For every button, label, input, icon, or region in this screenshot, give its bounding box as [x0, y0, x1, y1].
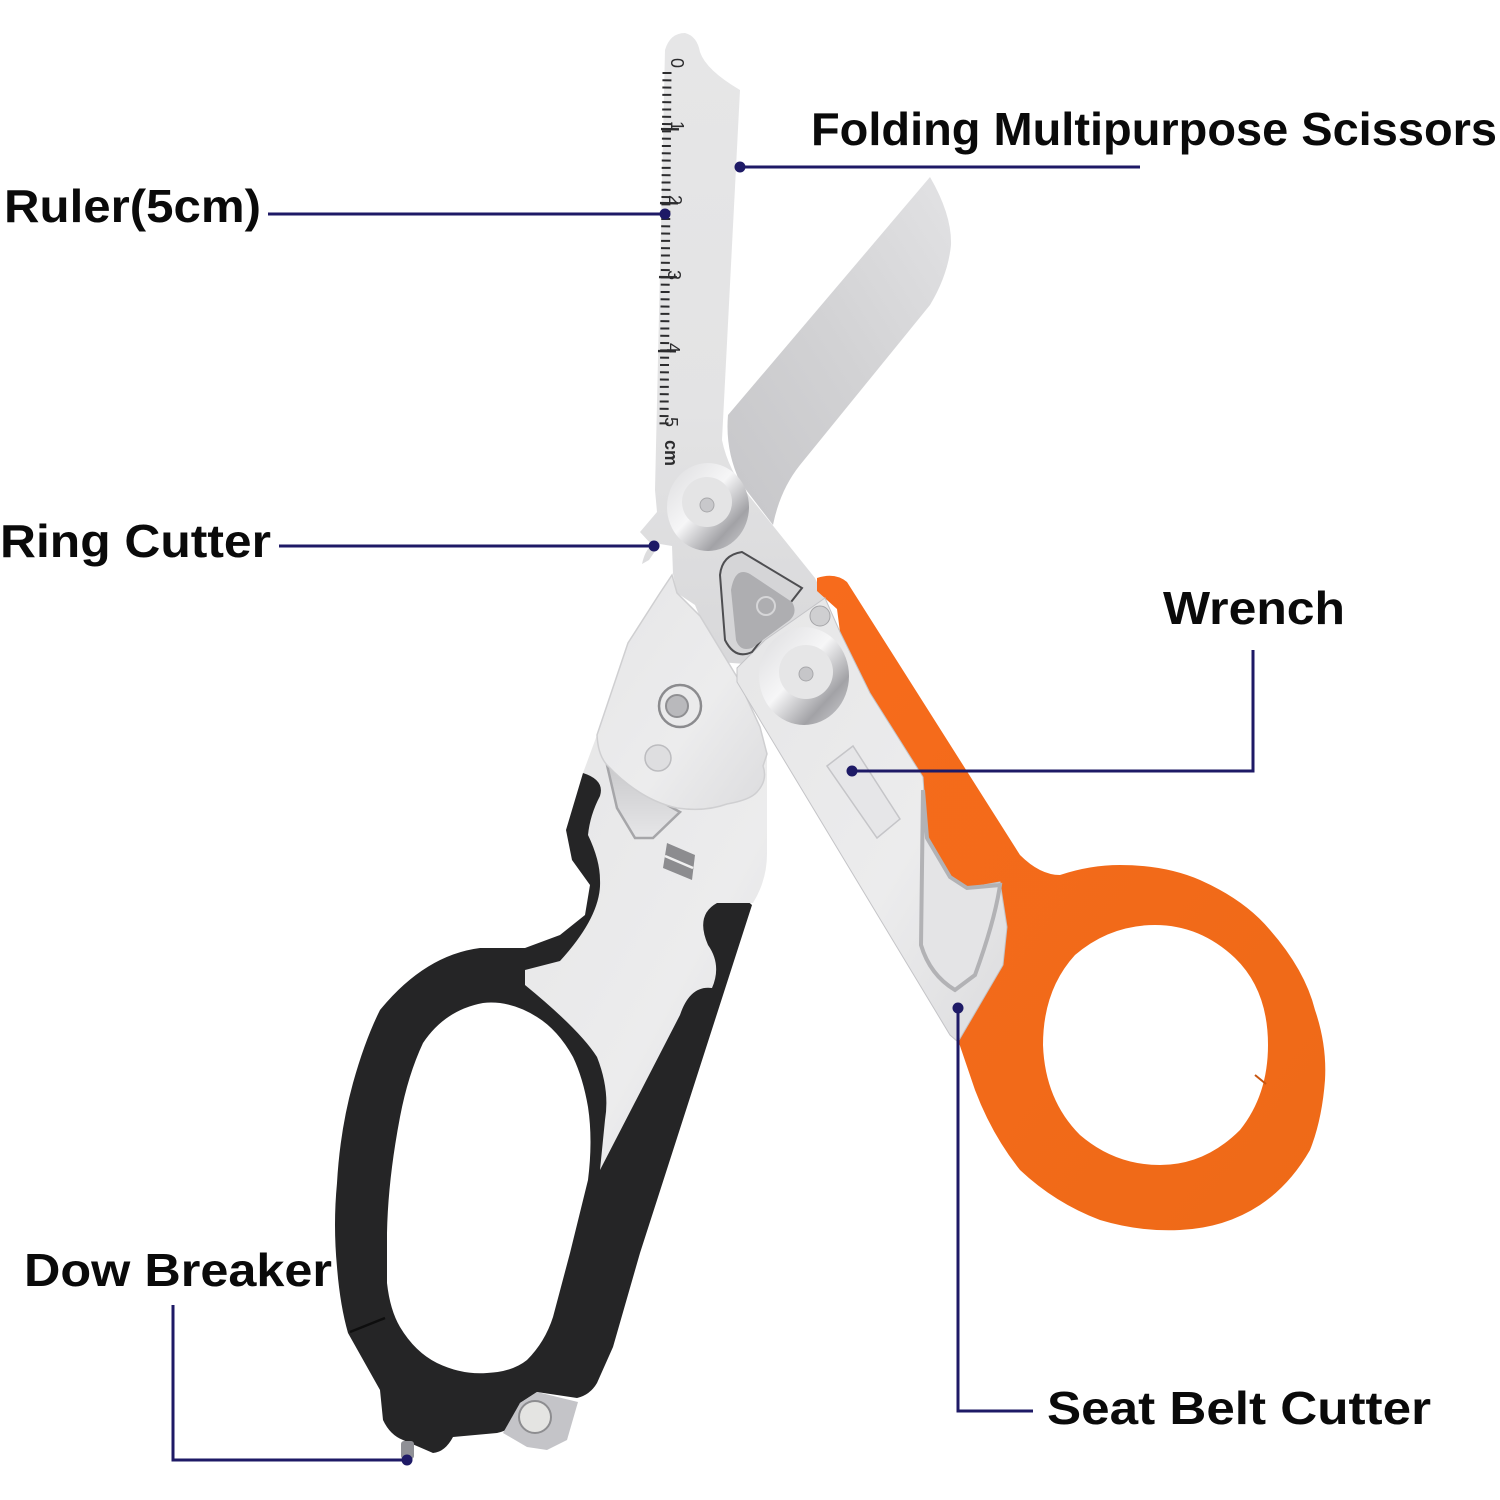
left steel body [525, 735, 767, 1170]
round pivot plate [597, 575, 767, 809]
small pin [810, 606, 830, 626]
angled lower blade [728, 177, 951, 525]
leader: wrench [846, 650, 1253, 776]
ruler markings: cm [661, 440, 681, 466]
scissors illustration [335, 33, 1325, 1459]
ruler markings: 1 [667, 121, 687, 131]
lower pivot screw [759, 627, 849, 725]
leader: seat belt cutter [952, 1002, 1033, 1411]
handle seam [350, 1318, 385, 1332]
leader: ring cutter [279, 540, 660, 552]
ruler markings: 0 [667, 58, 687, 68]
label: Dow Breaker: Dow Breaker [24, 1244, 332, 1296]
lower recess [607, 765, 680, 838]
leader: dow breaker [173, 1305, 412, 1466]
wrench slot [827, 746, 900, 838]
ruler markings: 3 [664, 270, 684, 280]
triangle lock button [720, 552, 802, 654]
ruler markings [661, 58, 687, 466]
label: Folding Multipurpose Scissors: Folding Multipurpose Scissors [811, 103, 1497, 155]
black handle [335, 773, 752, 1453]
ruler blade with ring cutter arm [640, 33, 830, 665]
eyelet plate [503, 1392, 578, 1450]
leader: scissors [734, 162, 1140, 172]
ruler markings: 4 [663, 343, 683, 353]
right steel arm [737, 598, 1007, 1042]
label: Ring Cutter: Ring Cutter [0, 515, 271, 567]
ruler markings: 2 [665, 195, 685, 205]
handle notch [1255, 1075, 1266, 1084]
label: Ruler(5cm): Ruler(5cm) [4, 180, 261, 232]
glass breaker pin [401, 1441, 414, 1459]
slot [663, 843, 695, 880]
ruler markings: 5 [661, 417, 681, 427]
seat belt cutter recess [921, 790, 1000, 990]
label: Wrench: Wrench [1163, 582, 1345, 634]
label: Seat Belt Cutter: Seat Belt Cutter [1047, 1382, 1431, 1434]
leader: ruler [268, 208, 670, 220]
orange handle [817, 576, 1325, 1230]
rivet small [645, 745, 671, 771]
upper pivot screw [667, 463, 749, 551]
rivet large [659, 685, 701, 727]
